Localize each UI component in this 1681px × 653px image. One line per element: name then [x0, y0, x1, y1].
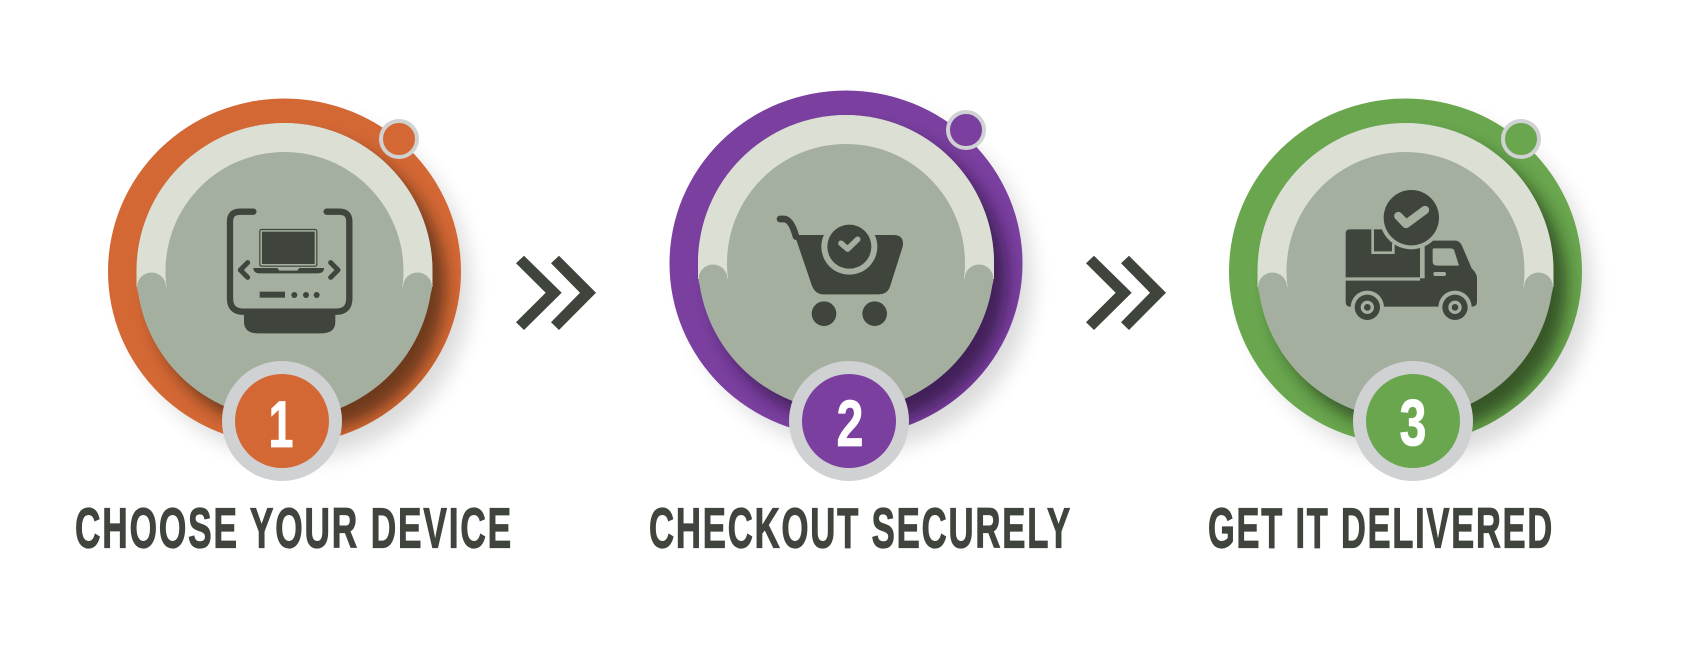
heading 2: CHECKOUT SECURELY — [649, 496, 1072, 560]
icon: shopping cart — [780, 219, 903, 326]
step 1: choose your device — [75, 98, 513, 560]
icon: delivery truck — [1346, 186, 1477, 324]
small dot 1 — [381, 121, 417, 157]
number badge 2: 2 — [836, 386, 864, 460]
step 2: checkout securely — [649, 90, 1072, 560]
arrow 1 — [516, 256, 596, 330]
small dot 3 — [1503, 121, 1539, 157]
arrow 2 — [1086, 256, 1166, 330]
number badge 3 — [1360, 368, 1466, 474]
number badge 2 — [796, 368, 902, 474]
number badge 1 — [228, 368, 336, 474]
number badge 3: 3 — [1400, 386, 1426, 460]
icon: device selection — [230, 212, 349, 333]
outer ring 3 — [1229, 98, 1592, 459]
outer ring 2 — [670, 90, 1032, 451]
small dot 2 — [948, 112, 984, 148]
number badge 1: 1 — [268, 387, 294, 461]
step 3: get it delivered — [1208, 98, 1592, 560]
heading 1: CHOOSE YOUR DEVICE — [75, 496, 513, 560]
outer ring 1 — [108, 98, 470, 459]
